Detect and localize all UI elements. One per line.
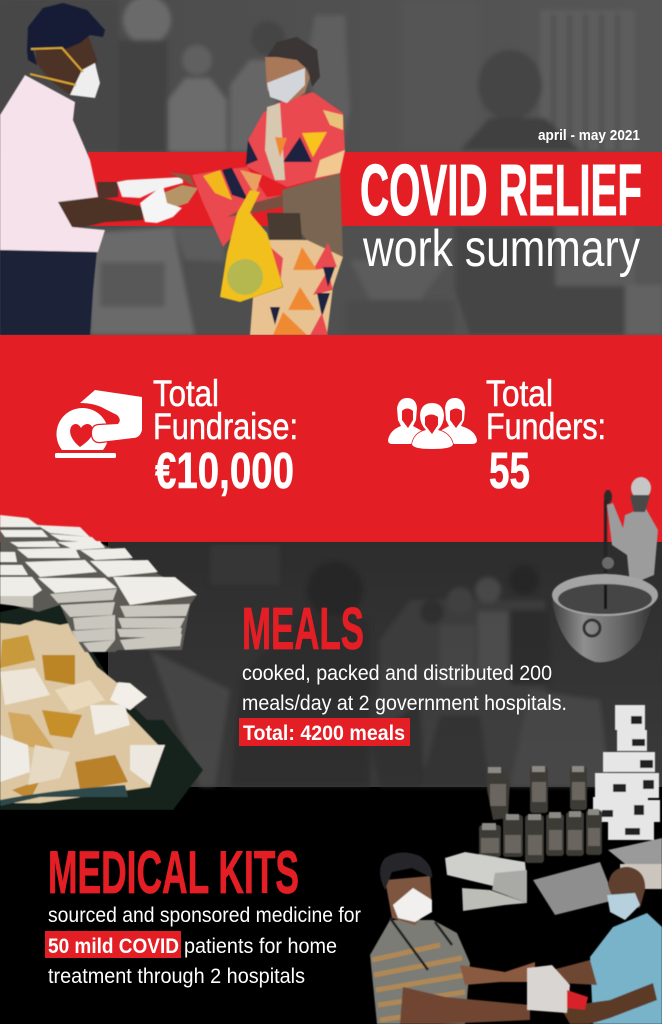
icon: hand with heart — [55, 390, 142, 458]
text: meals description: cooked, packed and distributed 200 — [242, 662, 552, 685]
date label: april - may 2021 — [538, 127, 640, 144]
photo: medicine boxes and bottles — [445, 705, 662, 915]
text: total funders: Total — [486, 373, 553, 414]
text: meals description — [242, 662, 567, 715]
photo: yellow bag — [220, 190, 283, 302]
meals background photo — [0, 542, 662, 810]
panel: meals — [0, 477, 662, 810]
text: total fundraise: Total — [153, 373, 219, 414]
text: total fundraise — [153, 373, 298, 499]
photo: man with blue shirt — [552, 867, 662, 1024]
text: total funders: 55 — [489, 442, 530, 499]
panel: hero — [0, 0, 662, 335]
photo: cook stirring pot — [552, 477, 658, 662]
text: total fundraise: Fundraise: — [153, 406, 298, 447]
text: meals description: meals/day at 2 government hospitals. — [242, 692, 567, 715]
hero background photo — [0, 0, 662, 335]
photo: doctor — [370, 852, 535, 1024]
photo: woman receiving food — [168, 37, 345, 335]
black background — [0, 810, 662, 1024]
text: total funders: Funders: — [486, 406, 606, 447]
photo: man handing food — [0, 3, 198, 335]
heading: medical kits: MEDICAL KITS — [48, 839, 299, 906]
photo: medical kit bag — [527, 965, 588, 1013]
photo: stacked foil trays — [0, 515, 197, 652]
panel: medical kits — [0, 705, 662, 1024]
text: total funders — [486, 373, 606, 499]
photo: crate of food packets — [0, 600, 203, 810]
panel: funding totals — [0, 335, 662, 542]
red background — [0, 335, 662, 542]
highlight: 50 mild covid: 50 mild COVID — [48, 935, 179, 958]
red title band — [88, 152, 662, 226]
text: medical description — [45, 904, 361, 988]
text: total fundraise: €10,000 — [155, 442, 294, 499]
text: medical description: sourced and sponsored medicine for — [48, 904, 361, 927]
heading: meals: MEALS — [242, 596, 364, 662]
icon: three funders — [388, 398, 477, 449]
text: medical description: treatment through 2 hospitals — [48, 965, 305, 988]
callout: total meals: Total: 4200 meals — [243, 722, 405, 745]
text: medical description: patients for home — [184, 935, 337, 958]
